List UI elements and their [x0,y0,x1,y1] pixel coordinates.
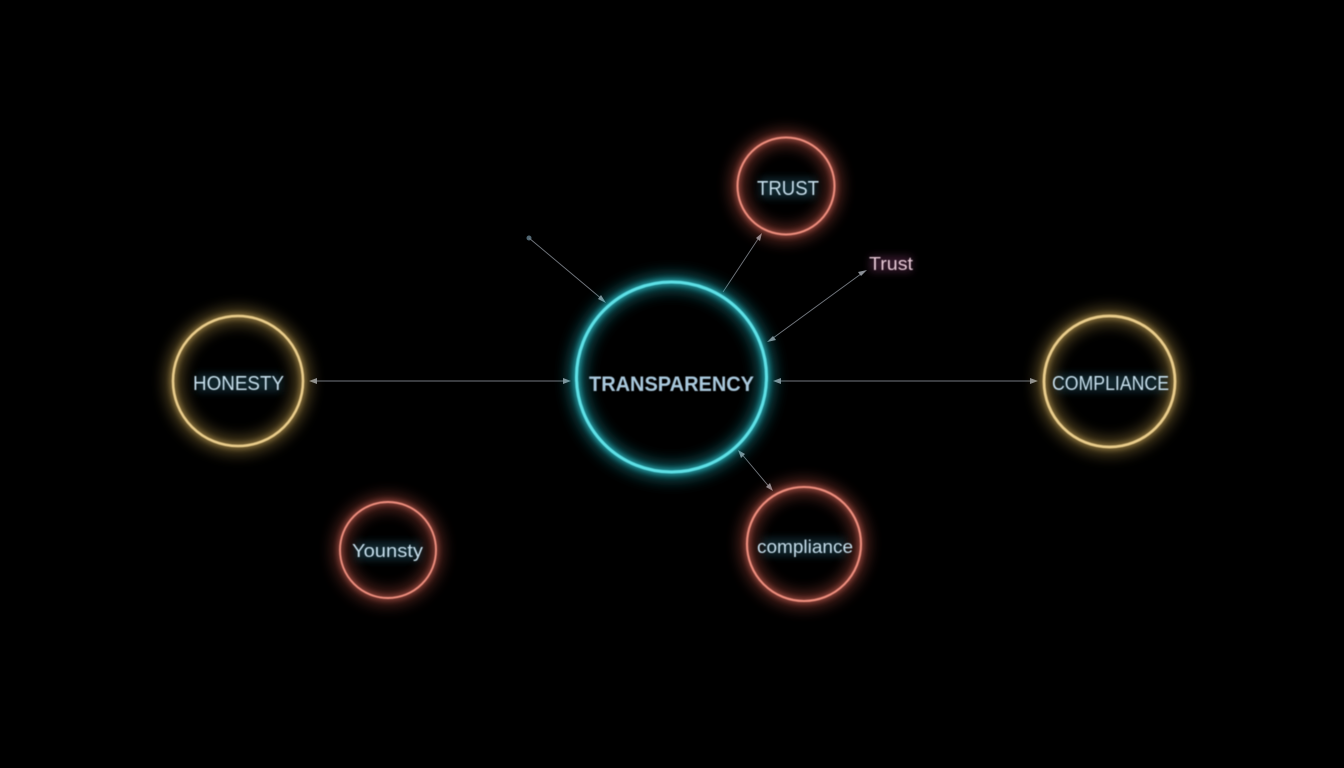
node: TRANSPARENCY [576,282,766,472]
arrow: transparency to HONESTY [309,378,571,384]
label: Younsty: Younsty [352,540,424,561]
arrow: transparency to compliance [738,450,773,491]
node: compliance [747,487,861,601]
label: HONESTY: HONESTY [193,373,284,395]
label: COMPLIANCE: COMPLIANCE [1052,373,1169,395]
label: TRUST: TRUST [757,178,819,200]
label: compliance: compliance [757,536,853,557]
arrow: transparency to TRUST [723,233,762,292]
node: TRUST [738,138,834,234]
arrow: transparency to COMPLIANCE [773,378,1038,384]
node: Younsty [340,502,436,598]
arrow: dot to transparency [526,236,606,303]
label: Trust: Trust [869,253,913,274]
label: TRANSPARENCY: TRANSPARENCY [589,373,754,396]
node: COMPLIANCE [1044,316,1175,447]
node: HONESTY [173,316,303,446]
arrow: transparency to Trust label [767,270,867,342]
